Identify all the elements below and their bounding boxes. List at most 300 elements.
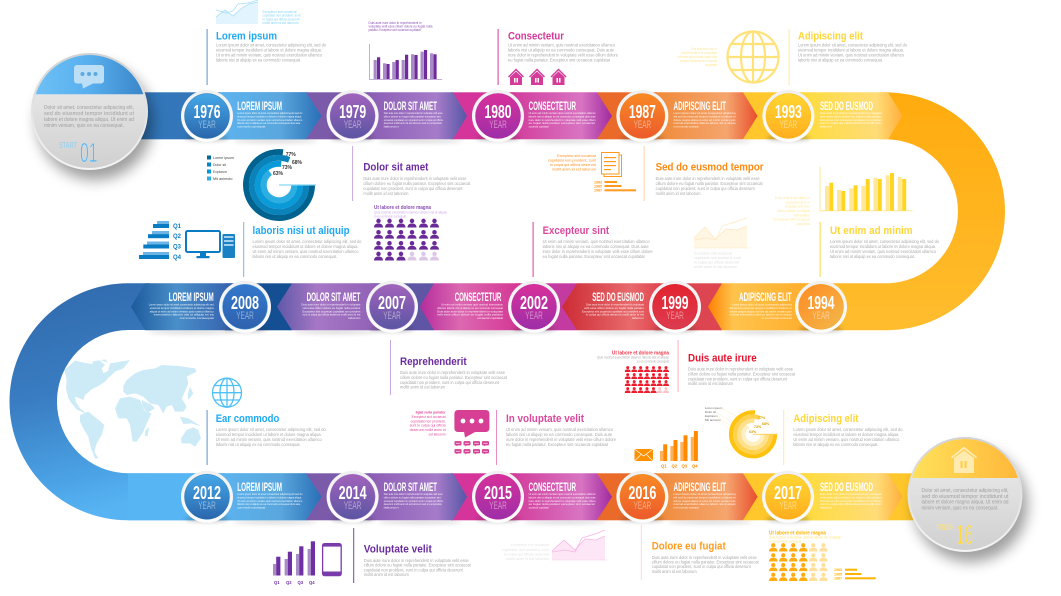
text block: laboris nisi ut aliquip: Lorem ipsum dolor sit amet, consectetur adipiscing elit, sed do — [252, 239, 362, 244]
segment: Consectetur 1980: eu fugiat nulla pariatur excepteur sint occaecat — [529, 121, 595, 125]
start description: Dolor sit amet, consectetur adipiscing elit, — [44, 105, 134, 111]
segment: Adipiscing elit 2016: dolore magna aliqua ut enim ad minim veniam quis — [674, 499, 736, 503]
text block: Reprehenderit: mollit anim id est laborum — [400, 384, 445, 390]
text block: Ear commodo — [207, 410, 326, 465]
chart: red people grid — [597, 350, 669, 393]
icon: yellow globe with caption: velit esse cillum dolore fugiat nulla — [677, 55, 717, 59]
segment: Adipiscing elit 2016: ADIPISCING ELIT — [674, 482, 726, 494]
icon: pink chat bubbles with caption: Excepteur sint occaecat — [412, 415, 446, 419]
segment: Sed do eusmod 2017: sunt in culpa qui officia deserunt mollit anim — [820, 502, 883, 506]
blue curved ribbon — [9, 283, 225, 520]
segment: Adipiscing elit 1994: ADIPISCING ELIT — [739, 292, 792, 304]
segment: Lorem ipsum 2012 — [220, 473, 322, 520]
badge 2012 — [181, 471, 233, 523]
text block: Adipiscing elit lower: Adipiscing elit — [793, 413, 859, 425]
chart: top blue area line — [216, 0, 300, 25]
chart: blue radial with legend: 68% — [292, 160, 303, 166]
segment: Consectetur 2015: irure dolor in reprehenderit in voluptate velit esse cillum — [529, 499, 596, 503]
segment: Adipiscing elit 1994 — [708, 283, 808, 330]
chart: light orange area line: mollit anim id est laborum — [694, 265, 737, 269]
segment: Sed do eusmod 1993 — [800, 92, 902, 139]
segment: Adipiscing elit 1987 — [655, 92, 758, 139]
icon: phone — [323, 544, 341, 576]
chart: yellow radial: Mit animoto — [705, 418, 721, 422]
segment: Consectetur 2002: Ut enim ad minim veniam quis nostrud exercitation — [441, 302, 503, 306]
text block: Ear commodo: laboris nisi ut aliquip ex ea commodo consequat. — [216, 442, 301, 447]
chart: yellow radial: 77% — [758, 416, 766, 420]
chart: orange people grid: 1985 — [834, 572, 842, 576]
chart: Q bars with computer: Q4 — [173, 255, 182, 261]
chart: pink area line: Excepteur sint occaecat — [511, 543, 549, 547]
chart: blue radial with legend: Lorem ipsum — [213, 155, 235, 160]
icon: pink chat bubbles with caption: sunt in culpa qui officia — [410, 424, 446, 428]
segment: Sed do eusmod 1999: laborum — [632, 316, 645, 320]
chart: envelope with orange bars: Q1 — [661, 464, 667, 468]
segment: Lorem ipsum 2008: exercitation laboris nisi ut aliquip ex ea — [154, 313, 214, 317]
icon: document with bars — [548, 152, 636, 193]
finish label: 16 — [956, 519, 973, 550]
segment: Adipiscing elit 1994: Lorem ipsum dolor sit amet consectetur adipiscing — [732, 302, 792, 306]
icon: house — [951, 446, 977, 473]
segment: Sed do eusmod 1993: SED DO EUSMOD — [820, 101, 873, 113]
segment: Lorem ipsum 2008: LOREM IPSUM — [169, 292, 214, 304]
segment: Dolor sit amet 1979: occaecat cupidatat non proident sunt in culpa qui officia — [384, 118, 443, 122]
start description: minim veniam, quis ex ea consequat. — [44, 123, 124, 129]
segment: Sed do eusmod 2017 — [800, 473, 902, 520]
chart: top blue area line: Excepteur sint occaecat — [262, 10, 296, 14]
segment: Consectetur 1980: occaecat cupidatat — [529, 125, 549, 129]
badge 2002: 2002 — [520, 292, 548, 313]
badge 1976: 1976 — [194, 101, 220, 122]
badge 2014 — [327, 471, 379, 523]
chart: orange people grid: ex ea commodo consequat — [769, 540, 801, 544]
badge 2015: 2015 — [484, 482, 512, 503]
chart: light orange area line — [694, 218, 749, 269]
text block: Adipiscing elit top: laboris nisi ut aliquip ex ea commodo consequat. — [798, 58, 883, 62]
chart: light orange area line: cupidatat non proident, sunt — [694, 256, 741, 260]
text block: Reprehenderit: Duis aute irure dolor in reprehenderit in voluptate velit esse — [400, 370, 505, 375]
icon: document with bars: in culpa qui officia deserunt — [550, 163, 596, 167]
badge 1999 — [649, 281, 701, 333]
timeline row 3 — [128, 473, 923, 524]
text block: Duis aute irure: cupidatat non proident, sunt in culpa qui officia deserunt — [688, 376, 788, 382]
segment: Lorem ipsum 2012: commodo consequat — [237, 506, 265, 510]
finish circle — [908, 437, 1028, 562]
finish description — [922, 488, 1009, 512]
segment: Dolor sit amet 2007: laborum — [348, 316, 361, 320]
text block: Dolor sit amet: Duis aute irure dolor in reprehenderit in voluptate velit esse — [363, 176, 467, 181]
segment: Dolor sit amet 2014: DOLOR SIT AMET — [384, 482, 437, 494]
segment: Consectetur 2002: occaecat cupidatat — [477, 316, 503, 320]
text block: Lorem ipsum — [207, 29, 326, 85]
badge 1993: 1993 — [775, 101, 802, 122]
chart: purple quarter bars with phone: Q1 — [274, 580, 280, 585]
finish description: Dolor sit amet, consectetur adipiscing elit, — [922, 488, 1009, 494]
badge 1994: YEAR — [812, 310, 830, 322]
text block: Excepteur sint: laboris nisi ut aliquip ex ea commodo consequat. Duis aute — [543, 244, 649, 249]
text block: Adipiscing elit lower — [783, 410, 903, 465]
text block: In voluptate velit: irure dolor in reprehenderit in voluptate velit esse cillum dolore — [506, 437, 616, 442]
text block: Voluptate velit: Voluptate velit — [364, 544, 432, 556]
segment: Sed do eusmod 2017: Duis aute irure dolor in reprehenderit in voluptate — [820, 492, 882, 496]
text block: Adipiscing elit lower: Lorem ipsum dolor sit amet, consectetur adipiscing elit, sed do — [793, 427, 903, 432]
segment: Dolor sit amet 1979: Duis aute irure dolor in reprehenderit in voluptate velit esse — [384, 111, 443, 115]
icon: pink chat bubbles with caption: cupidatat non proident, — [411, 419, 446, 423]
text block: Ut enim ad minim: Ut enim ad minim — [830, 225, 913, 237]
icon: document with bars: cupidatat non proident, sunt — [548, 158, 596, 162]
chart: blue radial with legend: 73% — [282, 165, 293, 171]
chart: yellow bar chart: Excepteur sint occaecat — [774, 218, 810, 222]
segment: Dolor sit amet 1979: deserunt mollit anim id est laborum sed ut perspiciatis — [384, 121, 442, 125]
badge 2012: 2012 — [193, 482, 221, 503]
segment: Lorem ipsum 2012: Ut enim ad minim veniam quis nostrud exercitation ullamco — [237, 499, 303, 503]
text block: In voluptate velit: eu fugiat nulla pariatur. Excepteur sint occaecat cupidatat — [506, 442, 609, 447]
chart: light orange area line: Excepteur sint occaecat — [694, 252, 732, 256]
segment: Dolor sit amet 2007: Excepteur sint occaecat cupidatat non proident — [302, 309, 361, 313]
text block: Consectetur: Ut enim ad minim veniam, quis nostrud exercitation ullamco — [508, 42, 615, 48]
segment: Consectetur 2015: CONSECTETUR — [529, 482, 576, 494]
badge 2002: YEAR — [525, 310, 543, 322]
segment: Dolor sit amet 2014: laborum — [384, 506, 399, 510]
segment: Sed do eusmod 1993: sunt in culpa qui officia deserunt mollit anim — [820, 121, 883, 125]
badge 1980: YEAR — [489, 119, 507, 131]
text block: Sed do eusmod tempor: cillum dolore eu fugiat nulla pariatur. Excepteur sint occaecat — [656, 181, 763, 186]
segment: Dolor sit amet 1979: cillum dolore eu fugiat nulla pariatur excepteur sint — [384, 114, 441, 118]
text block: Dolor sit amet — [352, 146, 471, 201]
text block: Dolore eu fugiat: cillum dolore eu fugiat nulla pariatur. Excepteur sint occaecat — [652, 560, 759, 564]
segment: Consectetur 2002: ullamco laboris nisi ut aliquip ex ea commodo consequat — [437, 306, 503, 310]
chart: yellow radial: 63% — [749, 430, 757, 434]
segment: Sed do eusmod 1999: velit esse cillum dolore eu fugiat nulla pariatur — [584, 306, 644, 310]
chart: blue radial with legend — [207, 152, 316, 218]
segment: Consectetur 2002: velit esse cillum dolore eu fugiat nulla pariatur — [437, 313, 503, 317]
text block: Reprehenderit — [390, 340, 508, 395]
icon: document with bars: 1985 — [594, 184, 602, 188]
segment: Lorem ipsum 1976: Ut enim ad minim veniam quis nostrud exercitation ullamco — [237, 118, 303, 122]
badge 2016: YEAR — [634, 500, 651, 512]
segment: Lorem ipsum 2008: eiusmod tempor incididunt ut labore et dolore magna — [150, 306, 214, 310]
icon: yellow globe with caption: Duis aute irure dolor in — [691, 47, 717, 51]
segment: Adipiscing elit 1987: elit sed do eiusmod tempor incididunt ut labore et — [674, 114, 736, 118]
segment: Sed do eusmod 1993: Excepteur sint occaecat cupidatat non proident — [820, 118, 882, 122]
start description — [44, 105, 134, 129]
badge 2016: 2016 — [628, 482, 656, 503]
badge 2014: YEAR — [344, 500, 361, 512]
badge 2017 — [762, 471, 814, 523]
icon: chat bubble — [74, 65, 104, 88]
text block: Ut enim ad minim: Ut enim ad minim veniam, quis nostrud exercitation ullamco — [830, 249, 936, 254]
chart: purple quarter bars with phone — [273, 541, 341, 585]
segment: Consectetur 1980: CONSECTETUR — [529, 101, 576, 113]
text block: Ut enim ad minim: eiusmod tempor incididunt ut labore et dolore magna aliqua. — [830, 244, 936, 249]
chart: yellow radial — [705, 406, 778, 456]
chart: yellow radial: 68% — [762, 422, 770, 426]
text block: Dolor sit amet: cupidatat non proident, sunt in culpa qui officia deserunt — [363, 186, 463, 191]
segment: Adipiscing elit 1994: dolore magna aliqua ut enim ad minim veniam quis — [730, 309, 792, 313]
text block: Adipiscing elit lower: eiusmod tempor incididunt ut labore et dolore magna aliqua. — [793, 432, 899, 437]
segment: Consectetur 2015: laboris nisi ut aliquip ex ea commodo consequat duis aute — [529, 495, 596, 499]
text block: Lorem ipsum: Ut enim ad minim veniam, quis nostrud exercitation ullamco — [216, 52, 322, 58]
finish description: minim veniam, quis ex ea consequat. — [922, 506, 998, 512]
segment: Sed do eusmod 1999: SED DO EUSMOD — [592, 292, 644, 304]
segment: Dolor sit amet 2007: DOLOR SIT AMET — [307, 292, 360, 304]
timeline row 1 — [130, 92, 902, 143]
text block: Dolore eu fugiat: cupidatat non proident, sunt in culpa qui officia deserunt — [652, 564, 751, 569]
chart: envelope with orange bars: Q3 — [682, 464, 688, 468]
chart: purple people grid: Quis nostrud exercitation ullamco laboris nisi ut aliquip — [374, 210, 447, 214]
icon: blue globe — [212, 378, 242, 407]
text block: Ut enim ad minim: laboris nisi ut aliquip ex ea commodo consequat. — [830, 254, 915, 259]
text block: Sed do eusmod tempor: mollit anim id est laborum — [656, 191, 701, 196]
orange curved ribbon — [790, 92, 1005, 330]
segment: Sed do eusmod 1993: Duis aute irure dolor in reprehenderit in voluptate — [820, 111, 882, 115]
badge 1979 — [327, 90, 379, 142]
segment: Lorem ipsum 1976: eiusmod tempor incididunt ut labore et dolore magna aliqua — [237, 114, 302, 118]
badge 1994: 1994 — [808, 292, 835, 313]
chart: top blue area line: cupidatat non proident, sunt — [262, 14, 300, 18]
chart: purple quarter bars with phone: Q2 — [286, 580, 292, 585]
segment: Lorem ipsum 2008 — [131, 283, 232, 330]
text block: Voluptate velit: cupidatat non proident, sunt in culpa qui officia deserunt — [364, 568, 463, 572]
text block: Excepteur sint — [533, 222, 653, 277]
segment: Adipiscing elit 1987: Lorem ipsum dolor sit amet consectetur adipiscing — [674, 111, 736, 115]
segment: Consectetur 1980: irure dolor in reprehenderit in voluptate velit esse cillum — [529, 118, 596, 122]
chart: blue radial with legend: Explorum — [213, 169, 228, 174]
segment: Consectetur 1980 — [510, 92, 612, 139]
text block: In voluptate velit: In voluptate velit — [506, 413, 584, 425]
chart: purple people grid — [374, 205, 447, 260]
icon: pink chat bubbles with caption: deserunt mollit anim id — [410, 428, 446, 432]
finish description: labore et dolore magna aliqua. Ut enim ad — [922, 500, 1008, 506]
segment: Lorem ipsum 2012: laboris nisi ut aliquip ex ea commodo consequat duis aute — [237, 502, 301, 506]
segment: Lorem ipsum 2008: commodo consequat — [180, 316, 214, 320]
segment: Adipiscing elit 1994: nostrud exercitation ullamco laboris nisi ut aliquip — [730, 313, 792, 317]
text block: Dolor sit amet: Dolor sit amet — [363, 162, 429, 174]
segment: Sed do eusmod 2017: velit esse cillum dolore eu fugiat nulla pariatur — [820, 495, 882, 499]
text block: Consectetur: eu fugiat nulla pariatur. Excepteur sint occaecat cupidatat — [508, 58, 611, 62]
badge 2015 — [472, 471, 524, 523]
segment: Consectetur 2002: Duis aute irure dolor in reprehenderit in voluptate — [437, 309, 503, 313]
text block: Excepteur sint: Excepteur sint — [543, 225, 609, 237]
chart: pink area line: mollit anim id est laborum — [506, 557, 549, 561]
chart: yellow bar chart: cillum dolore eu fugiat — [777, 209, 810, 213]
chart: purple people grid: Ut labore et dolore magna — [374, 205, 432, 211]
segment: Dolor sit amet 2007 — [277, 283, 378, 330]
chart: orange people grid: 1983 — [834, 568, 842, 572]
segment: Lorem ipsum 2012: Lorem ipsum dolor sit amet consectetur adipiscing elit sed do — [237, 492, 303, 496]
segment: Lorem ipsum 1976: LOREM IPSUM — [237, 101, 282, 113]
badge 2012: YEAR — [198, 500, 216, 512]
badge 1994 — [795, 281, 847, 333]
badge 2014: 2014 — [339, 482, 367, 503]
finish label: FINISH — [937, 523, 954, 532]
text block: Voluptate velit — [353, 528, 471, 583]
text block: Adipiscing elit top: Adipiscing elit — [798, 30, 863, 42]
text block: laboris nisi ut aliquip: laboris nisi ut aliquip — [252, 225, 350, 237]
chart: top blue area line: in culpa qui officia deserunt — [262, 17, 300, 21]
text block: laboris nisi ut aliquip: laboris nisi ut aliquip ex ea commodo consequat. — [252, 254, 338, 259]
segment: Consectetur 2002: CONSECTETUR — [455, 292, 502, 304]
badge 2007: YEAR — [383, 310, 401, 322]
text block: Lorem ipsum: Lorem ipsum — [216, 30, 277, 42]
segment: Sed do eusmod 2017: laborum — [820, 506, 833, 510]
segment: Lorem ipsum 1976: laboris nisi ut aliquip ex ea commodo consequat duis aute — [237, 121, 301, 125]
segment: Adipiscing elit 1987: nostrud exercitation ullamco laboris nisi ut aliquip — [674, 121, 736, 125]
segment: Dolor sit amet 2007: sunt in culpa qui officia deserunt mollit anim id est — [302, 313, 361, 317]
text block: Adipiscing elit top: Lorem ipsum dolor sit amet, consectetur adipiscing elit, sed do — [798, 42, 907, 48]
icon: document with bars: 1983 — [594, 180, 602, 184]
text block: In voluptate velit: Ut enim ad minim veniam, quis nostrud exercitation ullamco — [506, 427, 613, 432]
start label — [59, 137, 98, 168]
chart: envelope with orange bars — [634, 431, 698, 468]
text block: Duis aute irure: mollit anim id est laborum — [688, 381, 733, 386]
badge 1980: 1980 — [484, 101, 512, 122]
finish label — [937, 519, 973, 550]
segment: Adipiscing elit 2016: ex ea commodo consequat — [674, 506, 699, 510]
chart: yellow bar chart: voluptate velit esse — [785, 205, 810, 209]
chart: envelope with orange bars: Q4 — [692, 464, 698, 468]
chart: red people grid: ex ea commodo consequat — [637, 360, 669, 364]
segment: Consectetur 1980: Ut enim ad minim veniam quis nostrud exercitation ullamco — [529, 111, 596, 115]
icon: pink chat bubbles with caption: ligiat nulla pariatur — [416, 411, 446, 415]
text block: Sed do eusmod tempor: cupidatat non proident, sunt in culpa qui officia deserunt — [656, 186, 755, 191]
text block: Adipiscing elit top — [789, 29, 907, 85]
icon: computer — [186, 231, 235, 258]
segment: Adipiscing elit 2016: nostrud exercitation ullamco laboris nisi ut aliquip — [674, 502, 736, 506]
segment: Lorem ipsum 2008: Lorem ipsum dolor sit amet consectetur adipiscing elit sed — [149, 302, 214, 306]
chart: purple bar chart — [368, 21, 442, 80]
text block: laboris nisi ut aliquip: eiusmod tempor incididunt ut labore et dolore magna aliqua. — [252, 244, 358, 249]
text block: Lorem ipsum: Lorem ipsum dolor sit amet, consectetur adipiscing elit, sed do — [216, 42, 326, 48]
text block: Lorem ipsum: laboris nisi ut aliquip ex ea commodo consequat. — [216, 58, 301, 62]
text block: Ear commodo: eiusmod tempor incididunt ut labore et dolore magna aliqua. — [216, 432, 322, 437]
badge 1979: YEAR — [344, 119, 361, 131]
text block: Adipiscing elit lower: Ut enim ad minim veniam, quis nostrud exercitation ullamco — [793, 437, 900, 442]
text block: Duis aute irure — [678, 340, 796, 392]
segment: Consectetur 1980: laboris nisi ut aliquip ex ea commodo consequat duis aute — [529, 114, 596, 118]
chart: Q bars with computer: Q3 — [173, 244, 182, 250]
icon: yellow globe with caption: reprehenderit in voluptate — [681, 51, 717, 55]
chart: purple people grid: ex ea commodo consequat — [374, 214, 406, 218]
segment: Consectetur 2015: eu fugiat nulla pariatur excepteur sint occaecat — [529, 502, 595, 506]
icon: document with bars: Excepteur sint occaecat — [557, 154, 596, 158]
chart: blue radial with legend: 77% — [286, 152, 296, 158]
icon: three houses — [508, 68, 566, 85]
chart: Q bars with computer — [139, 221, 235, 261]
text block: Duis aute irure: Duis aute irure dolor in reprehenderit in voluptate velit esse — [688, 367, 793, 372]
chart: pink area line: cupidatat non proident, sunt — [502, 548, 549, 552]
icon: yellow globe with caption: pariatur. Excepteur sint occaecat — [680, 59, 717, 63]
badge 1999: YEAR — [666, 310, 684, 322]
chart: purple bar chart: voluptate velit esse cillum dolore eu fugiat nulla — [368, 24, 432, 28]
badge 1987 — [616, 90, 668, 142]
text block: Excepteur sint: irure dolor in reprehenderit in voluptate velit esse cillum dolore — [543, 249, 653, 254]
text block: Excepteur sint: Ut enim ad minim veniam, quis nostrud exercitation ullamco — [543, 239, 650, 244]
badge 2015: YEAR — [489, 500, 507, 512]
segment: Adipiscing elit 1994: ex ea commodo consequat — [762, 316, 792, 320]
year badges — [181, 90, 847, 523]
icon: document with bars: mollit anim id est laborum — [552, 168, 596, 172]
start circle — [31, 53, 153, 180]
chart: orange people grid: Ut labore et dolore magna — [769, 530, 826, 536]
badge 1993 — [762, 90, 814, 142]
segment: Dolor sit amet 2014: deserunt mollit anim id est laborum sed ut perspiciatis — [384, 502, 442, 506]
text block: Ear commodo: Ear commodo — [216, 413, 280, 425]
text block: Dolore eu fugiat: Dolore eu fugiat — [652, 540, 726, 552]
text block: Consectetur — [498, 29, 618, 85]
chart: yellow bar chart: nulla pariatur. — [793, 213, 810, 217]
segment: Lorem ipsum 2012: eiusmod tempor incididunt ut labore et dolore magna aliqua — [237, 495, 302, 499]
segment: Dolor sit amet 1979 — [367, 92, 467, 139]
badge 2007: 2007 — [378, 292, 406, 313]
badge 2017: YEAR — [779, 500, 797, 512]
badge 2016 — [616, 471, 668, 523]
badge 1979: 1979 — [339, 101, 366, 122]
segment: Sed do eusmod 1999: Excepteur sint occaecat cupidatat non proident sunt — [582, 309, 644, 313]
chart: blue radial with legend: 63% — [273, 171, 284, 177]
start label: 01 — [80, 137, 98, 168]
text block: Adipiscing elit lower: laboris nisi ut aliquip ex ea commodo consequat. — [793, 442, 878, 447]
icon: pink chat bubbles with caption — [410, 410, 489, 454]
badge 1993: YEAR — [780, 119, 797, 131]
text block: Ear commodo: Ut enim ad minim veniam, quis nostrud exercitation ullamco — [216, 437, 322, 442]
chart: light orange area line: in culpa qui officia deserunt — [694, 261, 739, 265]
text block: Dolor sit amet: cillum dolore eu fugiat nulla pariatur. Excepteur sint occaecat — [363, 181, 471, 186]
chart: blue radial with legend: Dolor sit — [213, 162, 227, 167]
icon: yellow globe with caption: cupidatat — [705, 63, 717, 67]
chart: orange people grid: Quis nostrud exercitation ullamco laboris nisi ut aliquip — [769, 536, 841, 540]
text block: Voluptate velit: mollit anim id est laborum — [364, 572, 409, 577]
chart: orange people grid — [769, 530, 876, 581]
badge 2008 — [219, 281, 271, 333]
segment: Dolor sit amet 1979: DOLOR SIT AMET — [384, 101, 437, 113]
start label: START — [59, 141, 77, 150]
chart: pink area line — [502, 530, 607, 561]
chart: yellow bar chart: cupidatat — [796, 222, 810, 226]
text block: Consectetur: laboris nisi ut aliquip ex ea commodo consequat. Duis aute — [508, 48, 614, 52]
segment: Lorem ipsum 2008: aliqua ut enim ad minim veniam quis nostrud ullamco — [150, 309, 214, 313]
chart: purple bar chart: Duis aute irure dolor in reprehenderit in — [368, 21, 422, 25]
segment: Dolor sit amet 1979: laborum — [384, 125, 399, 129]
icon: document with bars: 1987 — [594, 189, 602, 193]
segment: Dolor sit amet 2007: Duis aute irure dolor in reprehenderit in voluptate — [301, 302, 361, 306]
segment: Sed do eusmod 1993: laborum — [820, 125, 833, 129]
segment: Dolor sit amet 2014: cillum dolore eu fugiat nulla pariatur excepteur sint — [384, 495, 441, 499]
segment: Sed do eusmod 1999: in culpa qui officia deserunt mollit anim id est — [586, 313, 644, 317]
segment: Sed do eusmod 1999 — [562, 283, 660, 330]
badge 1976: YEAR — [198, 119, 216, 131]
segment: Sed do eusmod 2017: Excepteur sint occaecat cupidatat non proident — [820, 499, 882, 503]
chart: yellow radial: Lorem ipsum — [705, 406, 723, 410]
start description: labore et dolore magna aliqua. Ut enim ad — [44, 117, 134, 123]
badge 1980 — [472, 90, 524, 142]
segment: Adipiscing elit 2016: Lorem ipsum dolor sit amet consectetur adipiscing — [674, 492, 736, 496]
chart: red people grid: Quis nostrud exercitation ullamco laboris nisi ut aliquip — [597, 356, 669, 360]
text block: Sed do eusmod tempor: Sed do eusmod tempor — [656, 162, 764, 174]
segment: Consectetur 2015 — [510, 473, 612, 520]
badge 2017: 2017 — [774, 482, 802, 503]
segment: Dolor sit amet 2014: occaecat cupidatat non proident sunt in culpa qui officia — [384, 499, 443, 503]
badge 2008: YEAR — [236, 310, 254, 322]
segment: Lorem ipsum 1976: commodo consequat — [237, 125, 265, 129]
chart: purple bar chart: pariatur. Excepteur sint occaecat cupidatat — [368, 28, 420, 32]
text block: Dolore eu fugiat: mollit anim id est laborum — [652, 569, 697, 574]
chart: top blue area line: mollit anim id est laborum — [262, 21, 299, 25]
segment: Lorem ipsum 2012: LOREM IPSUM — [237, 482, 282, 494]
segment: Adipiscing elit 1987: ADIPISCING ELIT — [674, 101, 726, 113]
text block: Dolore eu fugiat — [641, 525, 759, 580]
text block: Reprehenderit: cillum dolore eu fugiat nulla pariatur. Excepteur sint occaecat — [400, 375, 508, 380]
